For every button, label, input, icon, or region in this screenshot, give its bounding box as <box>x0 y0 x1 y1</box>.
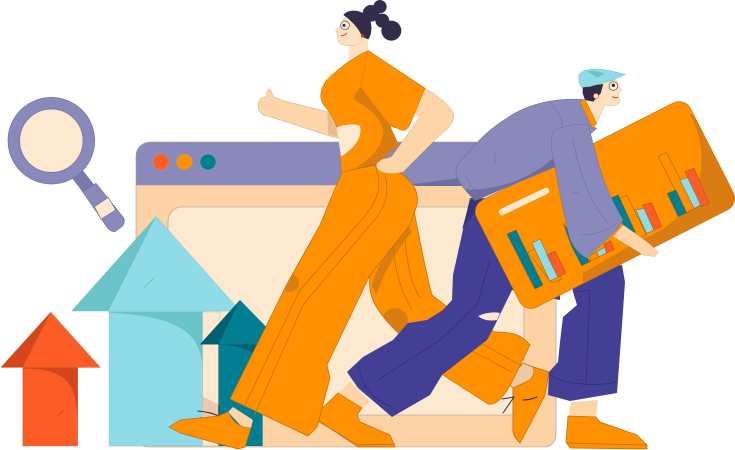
window shadow under jacket <box>413 178 470 186</box>
woman rear foot <box>507 363 549 443</box>
data card <box>471 97 735 313</box>
bar chart right <box>658 153 709 217</box>
man jacket <box>456 99 597 201</box>
man head <box>579 69 626 123</box>
woman rear leg <box>369 200 530 404</box>
big light-blue arrow <box>72 217 240 446</box>
bar chart middle <box>563 195 662 266</box>
man collar <box>580 99 597 128</box>
card shade <box>583 114 735 284</box>
man sleeve <box>552 124 623 258</box>
woman front leg <box>230 165 417 436</box>
browser window <box>136 142 556 447</box>
red arrow <box>1 312 100 446</box>
man trousers <box>347 198 625 417</box>
woman bent arm <box>377 88 454 173</box>
man upper body <box>456 69 658 258</box>
window dots <box>153 154 216 170</box>
floor squiggle marks <box>198 397 537 416</box>
card title pill <box>502 191 546 212</box>
man hand <box>613 225 658 257</box>
woman forward arm <box>258 89 338 138</box>
man left shoe <box>313 382 395 447</box>
woman upper body <box>258 0 454 173</box>
man right shoe <box>566 400 647 449</box>
woman head <box>335 0 401 59</box>
icon: magnifying glass <box>8 97 124 232</box>
bar chart left <box>507 230 566 289</box>
teal arrow <box>200 300 283 446</box>
woman front foot <box>169 407 253 449</box>
woman top <box>321 51 425 172</box>
